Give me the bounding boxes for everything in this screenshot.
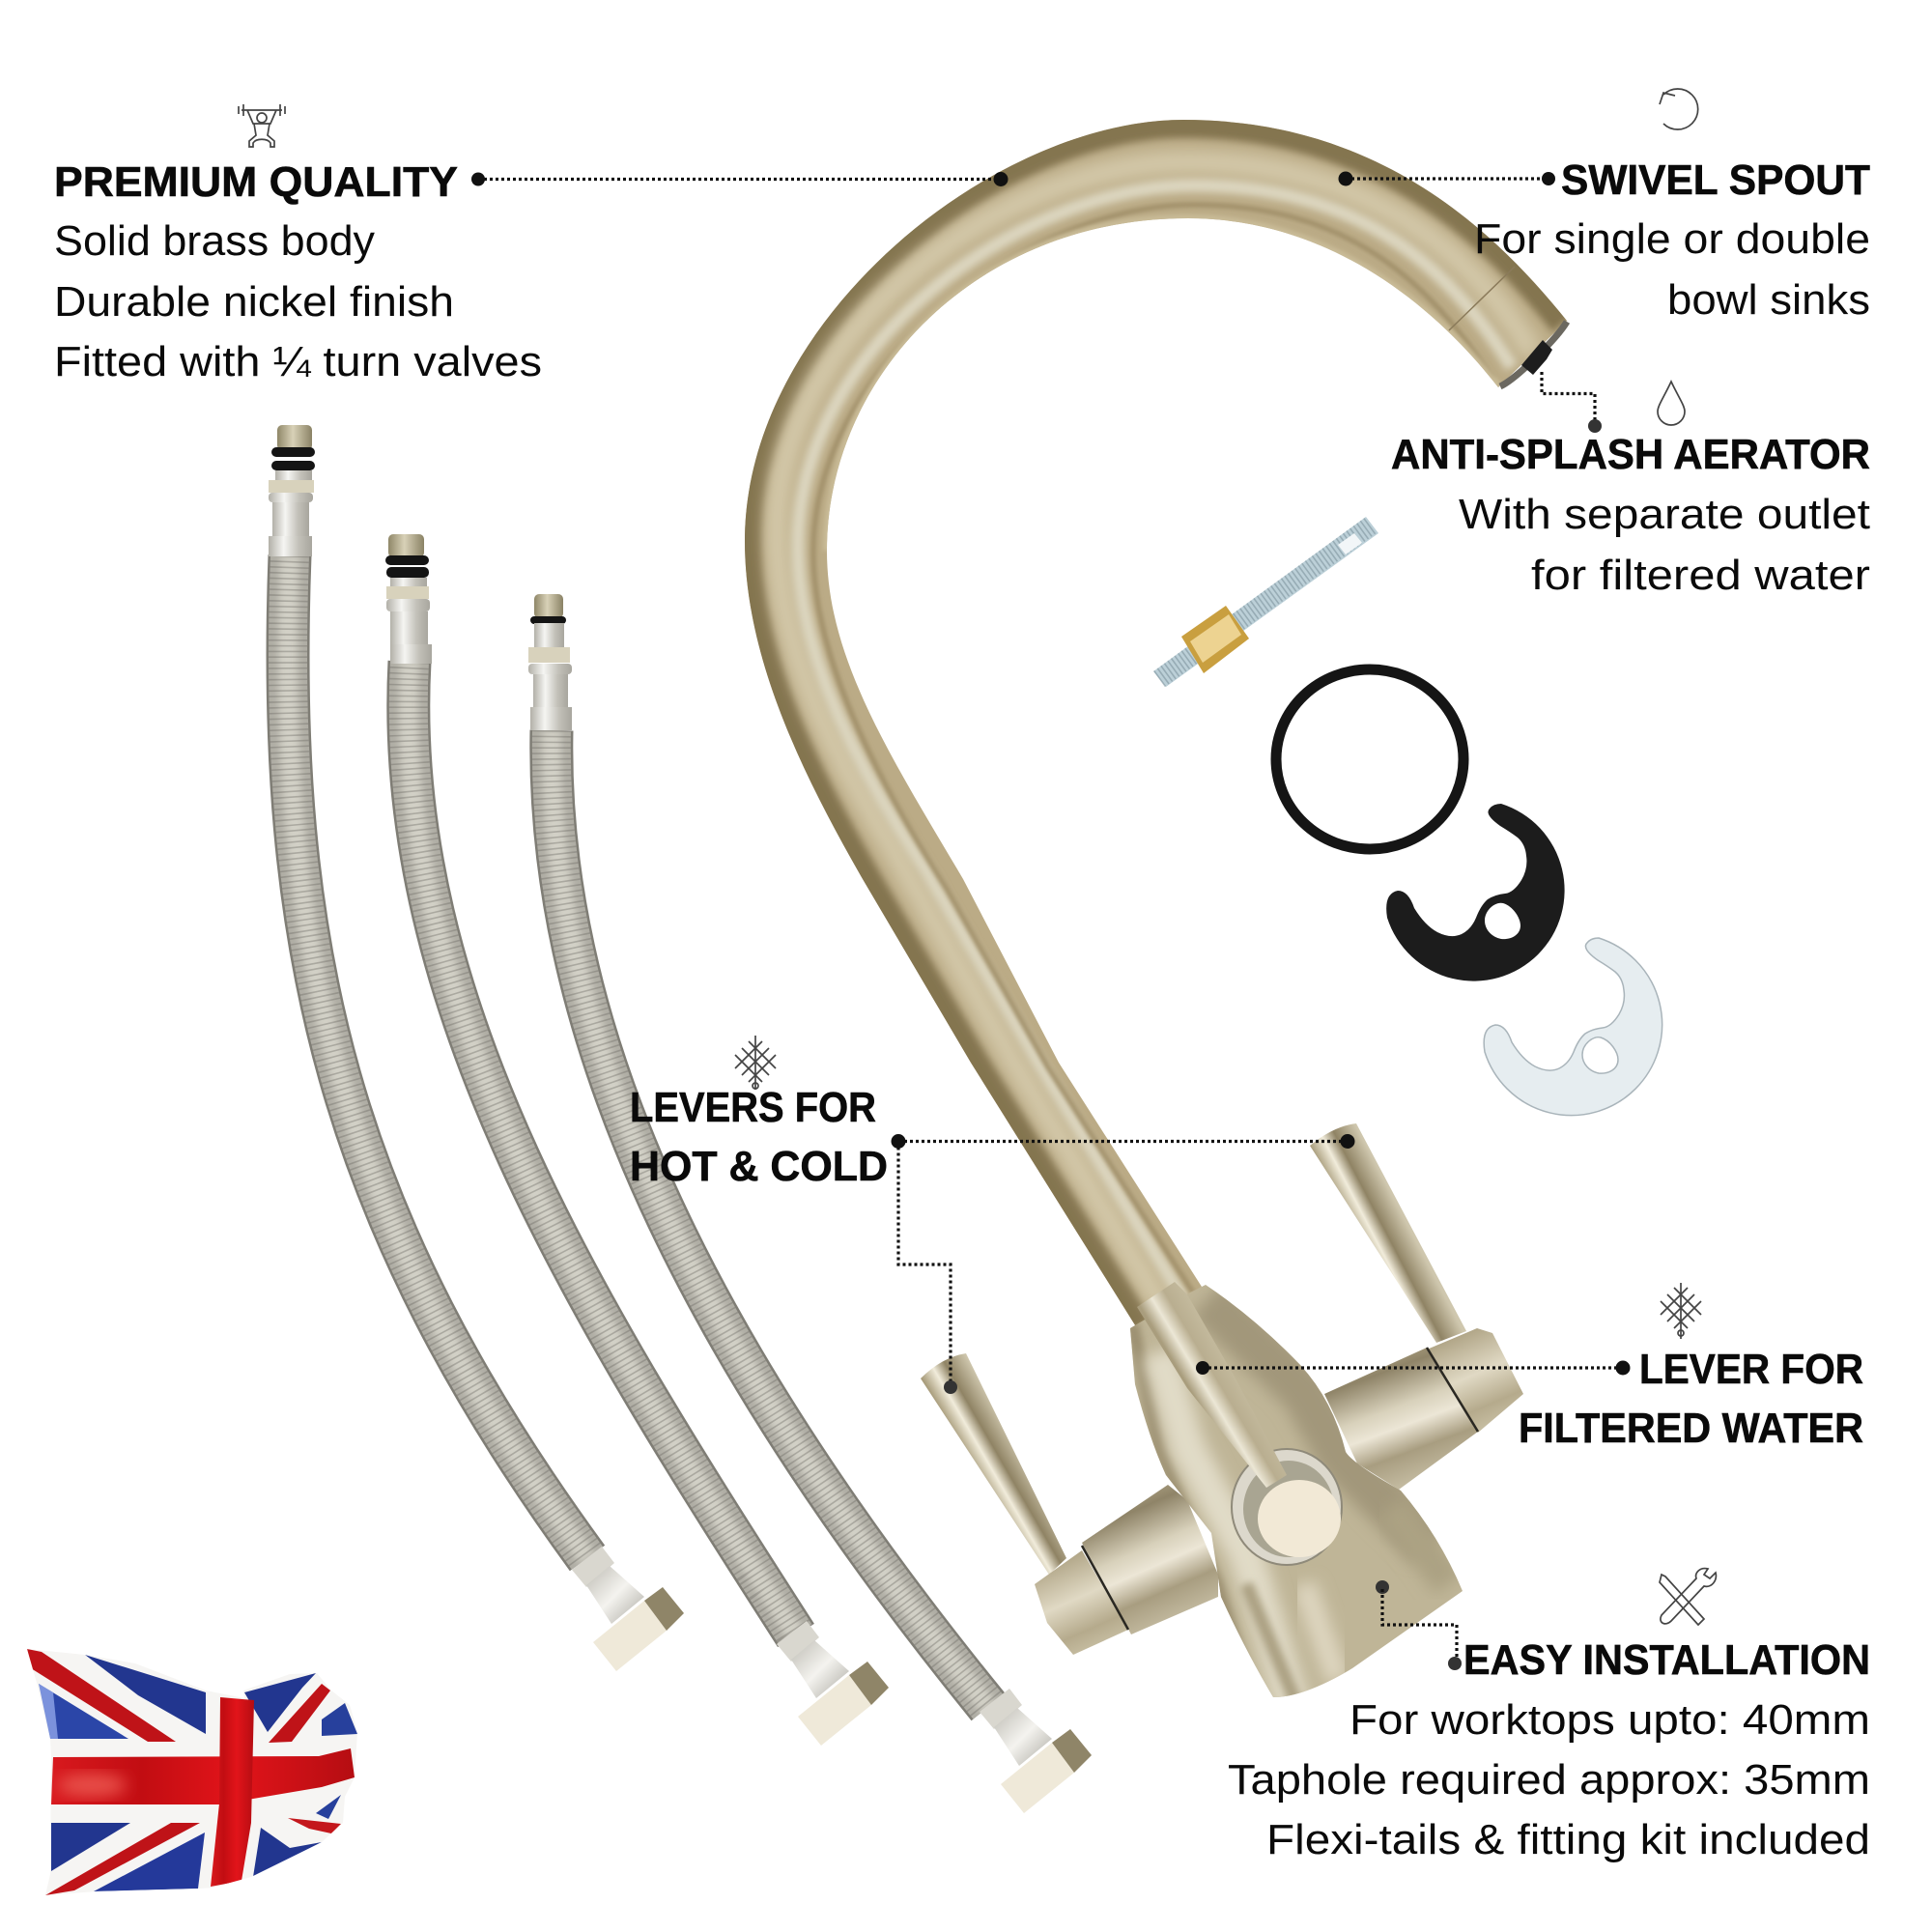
swivel spout tube — [734, 106, 1584, 1343]
heading: LEVER FOR — [1639, 1346, 1863, 1393]
text lines: Solid brass body — [54, 217, 375, 265]
text lines: Flexi-tails & fitting kit included — [1266, 1816, 1870, 1863]
text lines: For worktops upto: 40mm — [1350, 1696, 1870, 1744]
spout nozzle seam — [1449, 267, 1515, 330]
heading: HOT & COLD — [630, 1143, 888, 1190]
heading: ANTI-SPLASH AERATOR — [1391, 431, 1870, 478]
heading: PREMIUM QUALITY — [54, 158, 458, 206]
text lines: With separate outlet — [1459, 491, 1870, 538]
heading: FILTERED WATER — [1519, 1405, 1863, 1452]
callout: easy installation — [1228, 1569, 1870, 1863]
fitting kit: metal washer — [1484, 938, 1662, 1116]
centre filtered water lever — [1137, 1282, 1287, 1488]
heading — [630, 1084, 888, 1190]
flexi hose: middle — [385, 534, 889, 1746]
callout: lever for filtered water — [1196, 1283, 1863, 1452]
fitting kit: black rubber washer — [1386, 804, 1565, 981]
callout: swivel spout — [1339, 89, 1870, 324]
spout outlet end with aerator — [1500, 322, 1567, 386]
icon: water drop — [1658, 382, 1685, 425]
callout: levers for hot and cold — [630, 1036, 1354, 1394]
callout: anti-splash aerator — [1391, 372, 1870, 599]
icon: knot — [735, 1036, 776, 1090]
leader line — [1542, 372, 1602, 433]
heading: EASY INSTALLATION — [1463, 1636, 1870, 1684]
icon: weightlifter — [239, 104, 285, 147]
text lines — [1474, 215, 1870, 324]
leader line — [1339, 172, 1555, 185]
flexi hose: right — [528, 594, 1092, 1813]
text lines — [1228, 1696, 1870, 1863]
text lines — [1459, 491, 1870, 599]
heading — [1519, 1346, 1863, 1452]
text lines: For single or double — [1474, 215, 1870, 263]
text lines: bowl sinks — [1667, 276, 1870, 324]
fitting kit: threaded stud with brass nut — [1153, 517, 1378, 687]
heading: LEVERS FOR — [630, 1084, 876, 1131]
fitting kit: rubber o-ring — [1276, 669, 1463, 849]
right arm and hot lever — [1310, 1123, 1523, 1490]
icon: rotate arrow — [1660, 89, 1698, 129]
tap — [734, 106, 1584, 1710]
text lines: Durable nickel finish — [54, 278, 454, 326]
text lines: Taphole required approx: 35mm — [1228, 1756, 1870, 1804]
icon: crossed tools — [1660, 1569, 1716, 1625]
cartridge ring and cap — [1232, 1449, 1342, 1565]
text lines: for filtered water — [1531, 552, 1870, 599]
text lines — [54, 217, 542, 385]
heading: SWIVEL SPOUT — [1561, 156, 1870, 204]
flag: union jack — [27, 1649, 357, 1895]
leader line — [1376, 1580, 1462, 1670]
leader lines — [891, 1134, 1354, 1394]
icon: knot — [1661, 1283, 1701, 1339]
leader line — [471, 172, 1009, 186]
text lines: Fitted with ¼ turn valves — [54, 338, 542, 385]
callout: premium quality — [54, 104, 1009, 385]
tap body — [1130, 1285, 1463, 1697]
left arm and cold lever — [921, 1353, 1218, 1655]
leader line — [1196, 1360, 1631, 1376]
flexi hose: left — [269, 425, 684, 1671]
